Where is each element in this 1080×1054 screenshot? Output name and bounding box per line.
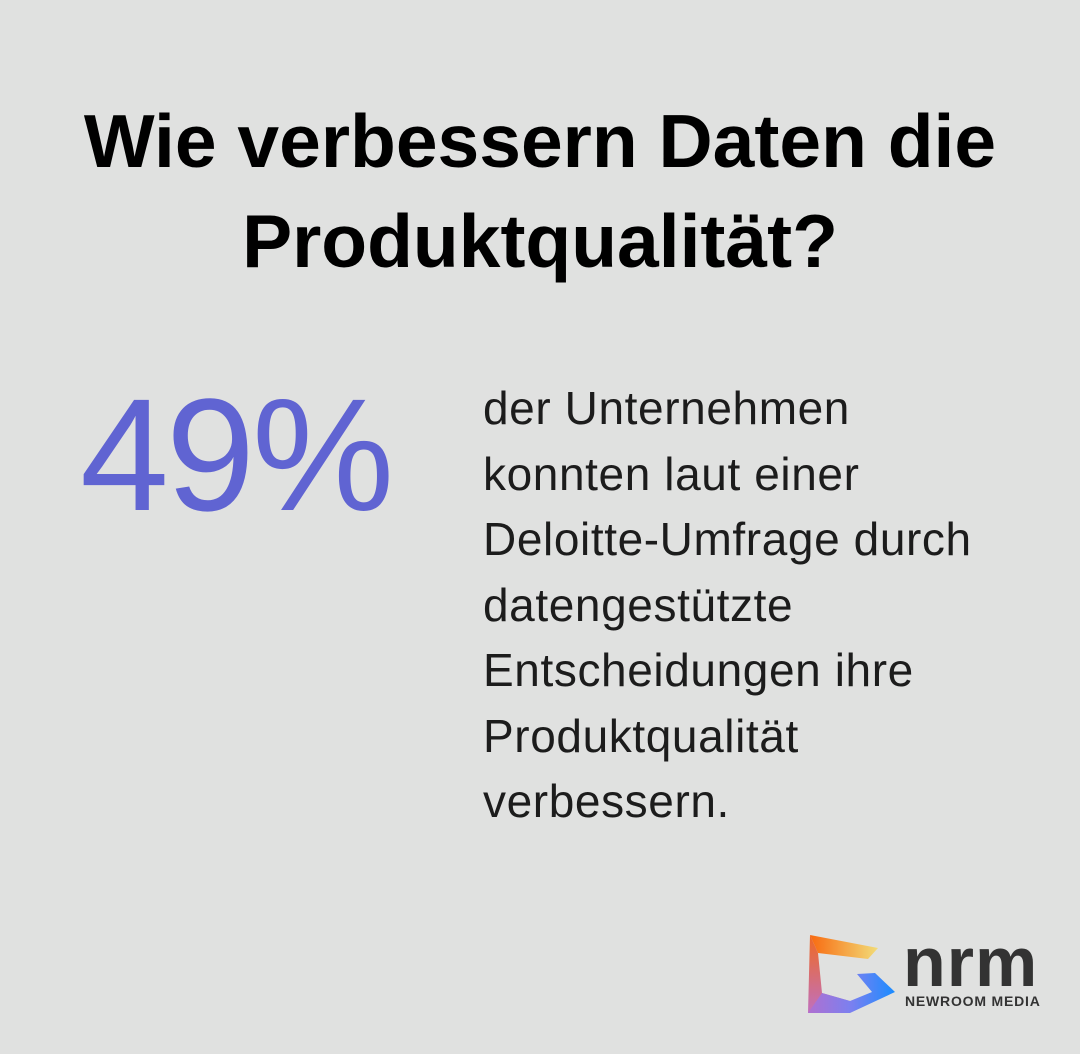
description text [483,382,972,827]
description text: Entscheidungen ihre [483,644,914,696]
description text: verbessern. [483,775,730,827]
description text: Deloitte-Umfrage durch [483,513,972,565]
description text: datengestützte [483,578,793,630]
description text: der Unternehmen [483,382,850,434]
big statistic: 49% [80,365,391,544]
logo: newroom media: NEWROOM MEDIA [905,993,1041,1009]
title: Wie verbessern Daten die [84,99,996,183]
description text: konnten laut einer [483,448,860,500]
title [84,99,996,283]
logo: newroom media [808,930,1041,1013]
description text: Produktqualität [483,710,799,762]
title: Produktqualität? [242,199,838,283]
